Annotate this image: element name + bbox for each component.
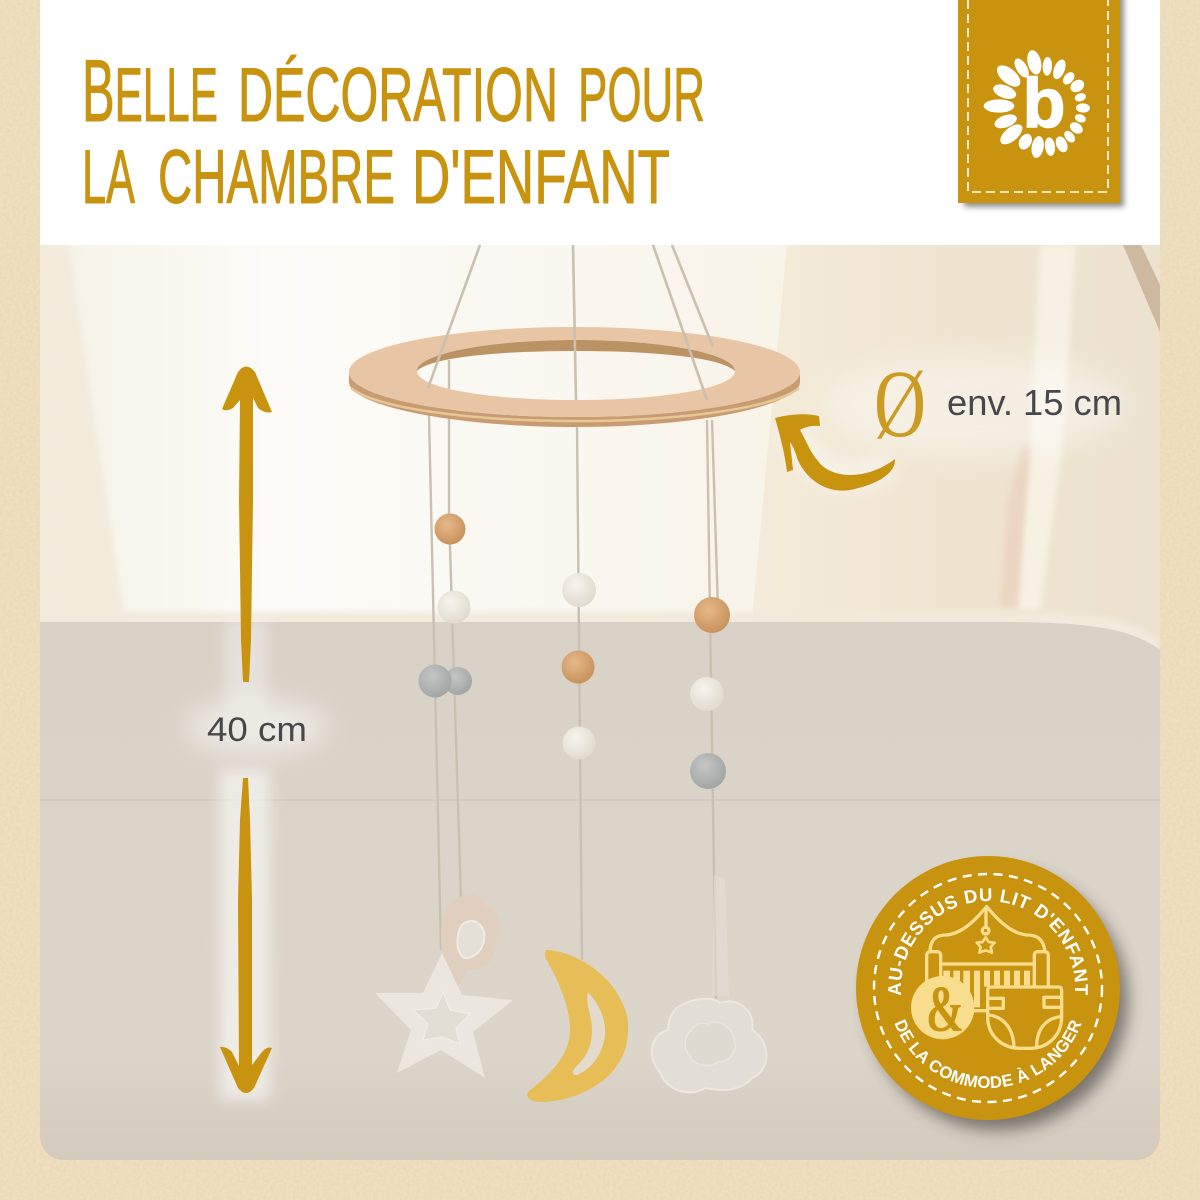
label: height — [187, 701, 327, 753]
title: BELLE — [82, 41, 218, 140]
wooden ring — [349, 327, 800, 427]
badge text: bottom: DE LA COMMODE À LANGER — [894, 1019, 1082, 1088]
strings over ring — [428, 245, 713, 400]
beads — [418, 514, 730, 789]
ornament: peach flower — [441, 895, 499, 986]
ornament: white star — [375, 953, 513, 1078]
ornament: white flower — [652, 875, 766, 1092]
header panel — [40, 0, 1160, 245]
ampersand: & — [926, 973, 964, 1046]
crib — [40, 612, 1160, 1160]
ornament: yellow moon — [527, 950, 628, 1102]
badge: usage — [856, 856, 1138, 1140]
title — [82, 41, 705, 220]
icon: crib and diaper — [911, 907, 1062, 1048]
label: height: 40 cm — [207, 711, 307, 749]
icon: brand logo flower — [984, 49, 1090, 159]
title: DÉCORATION — [238, 53, 558, 138]
arrow: height down — [220, 770, 272, 1100]
product photo — [40, 245, 1160, 1160]
arrow: curved to ring — [775, 414, 895, 491]
arrow: height up — [222, 366, 272, 710]
title: LA — [82, 135, 135, 220]
diameter symbol — [825, 350, 1125, 457]
title: D'ENFANT — [412, 135, 670, 220]
title: CHAMBRE — [158, 135, 395, 220]
title: POUR — [578, 53, 705, 138]
brand tag — [958, 0, 1124, 207]
diameter symbol: Ø — [874, 350, 926, 457]
mobile strings — [429, 360, 718, 1000]
curtains — [40, 245, 1160, 640]
logo letter: b — [1023, 64, 1065, 142]
badge text: top: AU-DESSUS DU LIT D'ENFANT — [888, 888, 1088, 996]
diameter label: env. 15 cm — [947, 382, 1122, 423]
